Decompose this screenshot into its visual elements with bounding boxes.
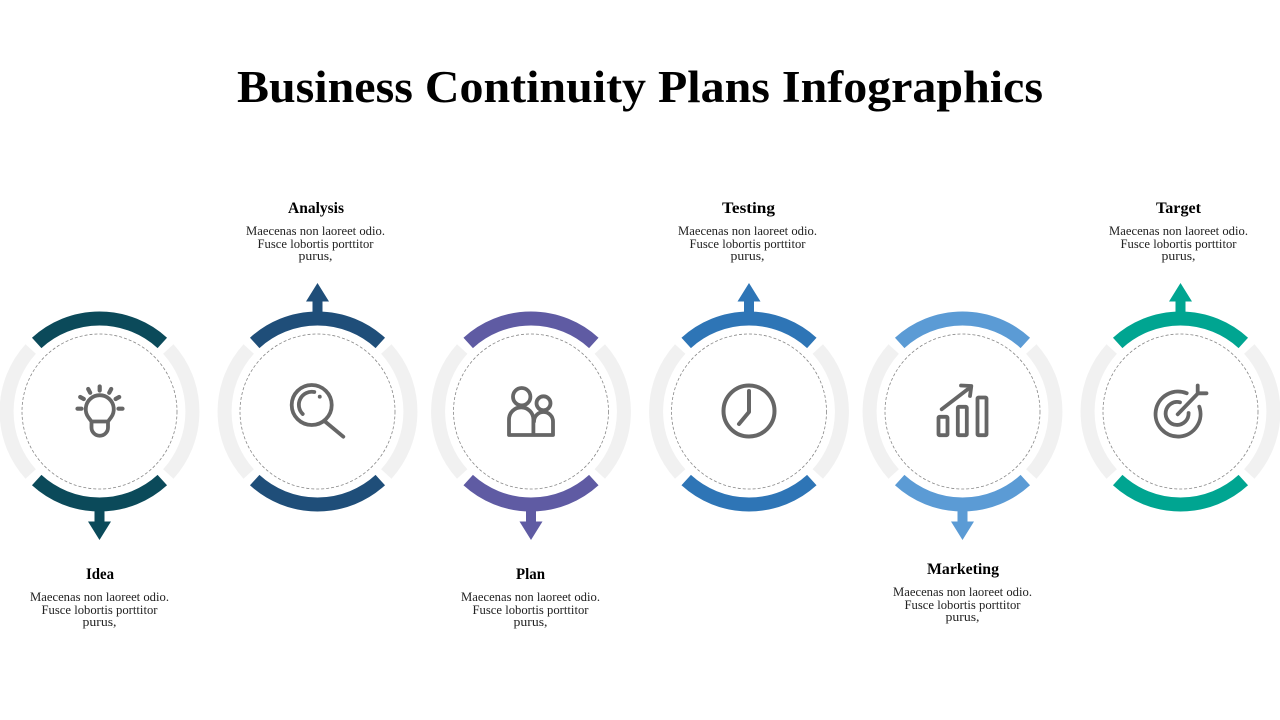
step: Target [1088, 200, 1273, 505]
title: Business Continuity Plans Infographics [237, 62, 1043, 112]
text: Target description: Maecenas non laoreet odio. [1109, 224, 1248, 238]
text: Marketing description: purus, [946, 610, 980, 624]
step: Analysis [225, 200, 410, 505]
text: Marketing description [893, 585, 1032, 624]
step: Marketing [870, 318, 1055, 624]
ring: Analysis [225, 318, 410, 505]
arrow: Analysis up [306, 283, 329, 314]
heading: Plan: Plan [516, 566, 545, 583]
text: Target description: purus, [1162, 249, 1196, 263]
text: Analysis description: Fusce lobortis porttitor [258, 237, 374, 251]
text: Testing description: Maecenas non laoreet odio. [678, 224, 817, 238]
text: Plan description: Maecenas non laoreet odio. [461, 590, 600, 604]
text: Testing description: purus, [730, 249, 764, 263]
heading: Target: Target [1156, 200, 1202, 217]
icon: people [509, 388, 553, 435]
step: Plan [438, 318, 624, 629]
ring: Testing [656, 318, 842, 505]
text: Idea description: Fusce lobortis porttitor [42, 603, 158, 617]
heading: Marketing: Marketing [927, 561, 999, 578]
arrow: Marketing down [951, 510, 974, 540]
text: Idea description: Maecenas non laoreet odio. [30, 590, 169, 604]
text: Idea description: purus, [82, 615, 116, 629]
ring: Marketing [870, 318, 1055, 505]
heading: Testing: Testing [722, 200, 775, 217]
text: Plan description [461, 590, 600, 629]
ring: Idea [7, 318, 192, 505]
text: Plan description: Fusce lobortis porttitor [472, 603, 589, 617]
arrow: Idea down [88, 510, 111, 540]
text: Analysis description [246, 224, 385, 263]
text: Testing description: Fusce lobortis porttitor [690, 237, 806, 251]
text: Target description: Fusce lobortis porttitor [1120, 237, 1237, 251]
text: Plan description: purus, [514, 615, 548, 629]
icon: magnifier [292, 385, 343, 437]
icon: target with dart [1156, 386, 1206, 437]
heading: Idea: Idea [86, 566, 114, 583]
text: Analysis description: purus, [298, 249, 332, 263]
arrow: Plan down [520, 510, 542, 540]
step: Testing [656, 200, 842, 505]
icon: light bulb [78, 386, 122, 436]
icon: clock [724, 386, 774, 436]
arrow: Testing up [738, 283, 760, 314]
text: Target description [1109, 224, 1248, 263]
text: Marketing description: Fusce lobortis porttitor [904, 598, 1021, 612]
ring: Target [1088, 318, 1273, 505]
ring: Plan [438, 318, 624, 505]
icon: bar chart with arrow [938, 386, 986, 435]
step: Idea [7, 318, 192, 629]
text: Marketing description: Maecenas non laoreet odio. [893, 585, 1032, 599]
text: Analysis description: Maecenas non laoreet odio. [246, 224, 385, 238]
heading: Analysis: Analysis [288, 200, 344, 217]
arrow: Target up [1169, 283, 1192, 314]
text: Idea description [30, 590, 169, 629]
text: Testing description [678, 224, 817, 263]
